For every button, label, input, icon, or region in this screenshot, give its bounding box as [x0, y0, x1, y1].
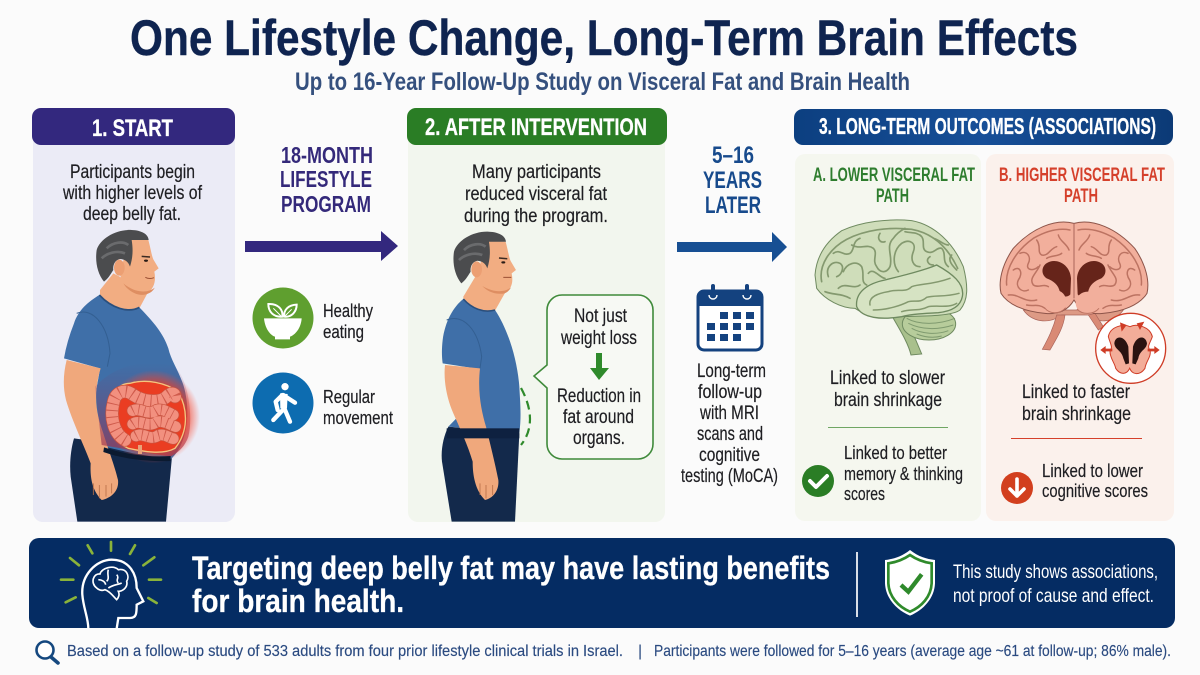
- heading: a: [813, 165, 975, 207]
- label: 5-16 years later: YEARS: [703, 167, 762, 194]
- arrow: down: [590, 353, 609, 380]
- illustration: atrophied brain: [1000, 222, 1166, 383]
- footer: study details: [36, 642, 1171, 663]
- icon: healthy eating: [252, 288, 314, 348]
- subtitle: Up to 16-Year Follow-Up Study on Visceral Fat and Brain Health: [295, 68, 910, 96]
- callout: not just weight loss: weight loss: [560, 328, 637, 349]
- panel: 1. start: [32, 108, 235, 522]
- text: lower cognitive: Linked to lower: [1042, 461, 1143, 481]
- label: 5-16 years later: 5–16: [712, 142, 754, 169]
- icon: shield: [885, 550, 935, 616]
- head: [453, 232, 516, 294]
- label: 18-month lifestyle program: PROGRAM: [281, 191, 371, 217]
- text: long-term follow-up: testing (MoCA): [681, 466, 778, 487]
- illustration: healthy brain: [815, 220, 967, 355]
- text: many participants: [464, 162, 608, 227]
- sub-panel: b. higher visceral fat path: [986, 154, 1174, 521]
- label: 18-month lifestyle program: 18-MONTH: [281, 142, 373, 168]
- header: 1. start: [32, 108, 235, 145]
- panel: 2. after intervention: [407, 108, 667, 522]
- text: regular movement: movement: [323, 408, 393, 428]
- text: better memory: Linked to better: [844, 443, 947, 463]
- text: healthy eating: Healthy: [323, 301, 373, 321]
- icon: regular movement: [252, 372, 314, 434]
- heading: a: A. LOWER VISCERAL FAT: [813, 165, 975, 186]
- label: 18-month lifestyle program: [280, 142, 373, 217]
- text: long-term follow-up: scans and: [697, 424, 763, 445]
- text: associations note: not proof of cause and effect.: [953, 586, 1154, 607]
- text: long-term follow-up: with MRI: [699, 403, 759, 424]
- header: 3. long-term outcomes: [794, 109, 1173, 145]
- text: many participants: during the program.: [464, 206, 608, 227]
- arrow: to panel 3: [677, 232, 787, 262]
- text: regular movement: Regular: [323, 387, 375, 407]
- header: 1. start: 1. START: [92, 115, 173, 142]
- text: better memory: [844, 443, 963, 504]
- icon: down arrow: [1001, 472, 1033, 504]
- text: faster shrinkage: [1022, 382, 1131, 425]
- text: slower shrinkage: Linked to slower: [830, 368, 946, 389]
- text: participants begin: [62, 162, 203, 225]
- text: participants begin: deep belly fat.: [83, 204, 181, 225]
- text: associations note: [953, 562, 1158, 607]
- label: 18-month lifestyle program: LIFESTYLE: [280, 166, 372, 192]
- text: faster shrinkage: brain shrinkage: [1022, 404, 1131, 425]
- text: regular movement: [323, 387, 393, 428]
- colon: [112, 392, 176, 454]
- text: lower cognitive: cognitive scores: [1042, 481, 1148, 501]
- arrow: to panel 2: [245, 231, 398, 261]
- banner: key takeaway: [29, 538, 1175, 629]
- text: better memory: scores: [844, 484, 885, 504]
- text: lower cognitive: [1042, 461, 1148, 501]
- text: many participants: Many participants: [472, 162, 601, 183]
- heading: b: PATH: [1064, 186, 1098, 207]
- headline text: [192, 550, 830, 619]
- heading: b: [999, 165, 1165, 207]
- text: many participants: reduced visceral fat: [465, 184, 608, 205]
- dashed belly outline: [521, 388, 530, 445]
- label: 5-16 years later: LATER: [705, 192, 761, 219]
- text: slower shrinkage: [830, 368, 946, 411]
- text: slower shrinkage: brain shrinkage: [834, 390, 942, 411]
- sub-panel: a. lower visceral fat path: [795, 154, 981, 521]
- callout: not just weight loss: Reduction in: [557, 386, 641, 407]
- illustration: slimmer man: [442, 232, 521, 522]
- text: participants begin: Participants begin: [70, 162, 195, 183]
- footer: study details: Based on a follow-up study of 533 adults from four prior lifestyle clinical trials in Israel.: [67, 643, 623, 660]
- heading: a: PATH: [876, 186, 909, 207]
- text: long-term follow-up: Long-term: [697, 361, 766, 382]
- icon: calendar: [698, 284, 762, 350]
- icon: check: [802, 465, 834, 497]
- headline text: for brain health.: [192, 583, 404, 619]
- callout: not just weight loss: fat around: [563, 407, 634, 428]
- text: long-term follow-up: [681, 361, 778, 487]
- panel: 3. long-term outcomes: [794, 109, 1174, 521]
- icon: magnifying glass: [36, 642, 58, 663]
- callout: not just weight loss: organs.: [573, 428, 625, 449]
- text: healthy eating: [323, 301, 373, 342]
- illustration: man with high visceral fat: [64, 230, 200, 522]
- headline text: Targeting deep belly fat may have lasting benefits: [192, 550, 830, 586]
- text: healthy eating: eating: [323, 322, 364, 342]
- text: participants begin: with higher levels of: [62, 183, 203, 204]
- head: [96, 230, 159, 295]
- icon: brain in head with rays: [61, 542, 161, 629]
- header: 2. after intervention: [407, 108, 667, 145]
- callout: not just weight loss: Not just: [574, 306, 628, 327]
- belly: visceral fat glow and intestines: [95, 363, 200, 463]
- header: 2. after intervention: 2. AFTER INTERVENTION: [425, 114, 647, 141]
- text: faster shrinkage: Linked to faster: [1022, 382, 1131, 403]
- footer: study details: |: [638, 643, 642, 660]
- text: long-term follow-up: cognitive: [699, 445, 760, 466]
- callout: not just weight loss: [534, 295, 653, 459]
- inset: enlarged ventricles: [1096, 313, 1166, 383]
- label: 5-16 years later: [703, 142, 762, 219]
- text: long-term follow-up: follow-up: [698, 382, 762, 403]
- text: better memory: memory & thinking: [844, 464, 963, 484]
